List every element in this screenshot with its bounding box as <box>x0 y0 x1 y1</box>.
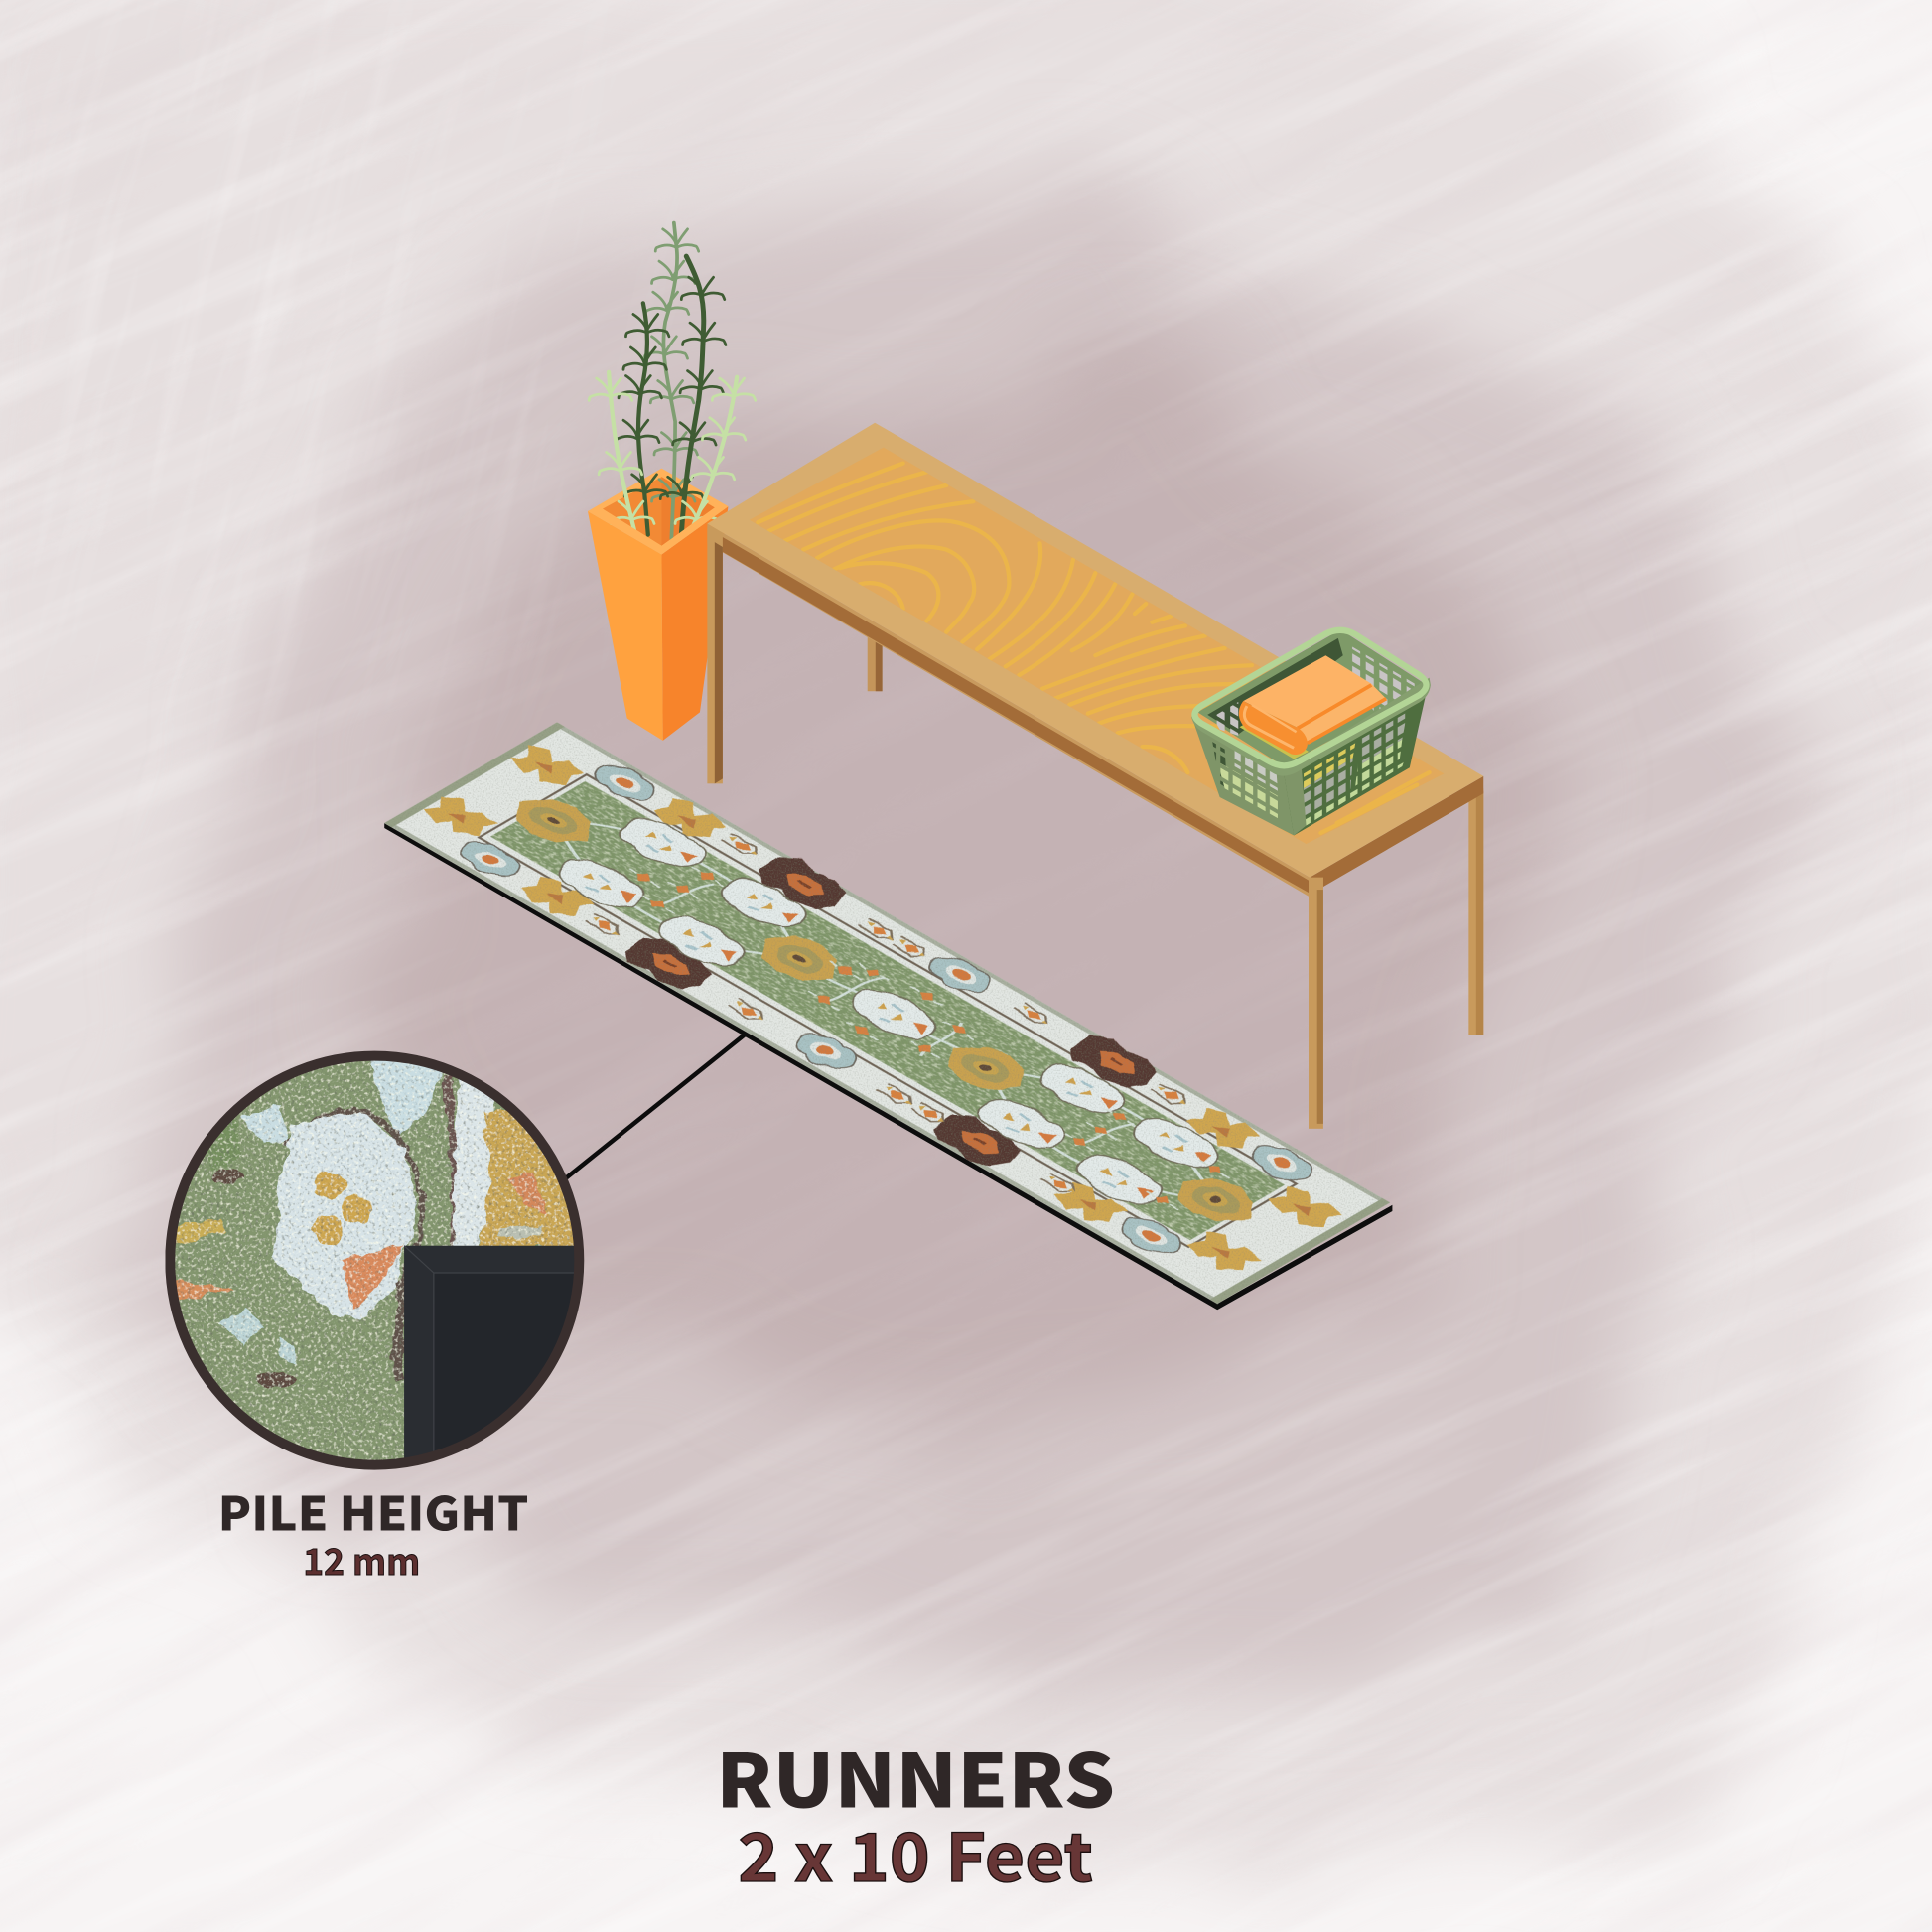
motif groups <box>415 742 1346 1277</box>
rug body <box>384 722 1390 1304</box>
runner rug <box>384 722 1392 1310</box>
gold medallions <box>497 788 1273 1233</box>
label: pile height: PILE HEIGHT <box>218 1475 528 1544</box>
basket back walls <box>1197 629 1427 766</box>
basket right face <box>1284 690 1427 835</box>
fabric backing <box>404 1246 589 1482</box>
pot front rim <box>588 506 728 554</box>
brown border motifs <box>614 851 1171 1173</box>
label: pile height <box>218 1475 528 1586</box>
gold border motifs <box>415 742 1346 1277</box>
basket with towels <box>1191 629 1431 835</box>
table front leg <box>1309 878 1323 1129</box>
blue border motifs <box>450 759 1322 1260</box>
lens pile texture <box>160 1047 592 1482</box>
title: runners size: RUNNERS <box>716 1724 1115 1830</box>
basket rim <box>1191 630 1431 776</box>
basket left face <box>1192 720 1294 835</box>
plant stems <box>589 223 756 538</box>
table <box>707 423 1483 1129</box>
label: pile height: 12 mm <box>303 1534 420 1586</box>
lens ring <box>170 1056 579 1465</box>
title: runners size <box>716 1724 1115 1901</box>
table back leg <box>868 628 883 691</box>
pot <box>588 469 728 741</box>
title: runners size: 2 x 10 Feet <box>738 1805 1093 1901</box>
table left leg <box>707 527 723 783</box>
white field motifs <box>546 811 1231 1211</box>
detail lens: pile close-up and backing <box>160 1047 592 1482</box>
table right leg <box>1468 788 1483 1035</box>
connector line from rug to detail lens <box>563 1035 745 1180</box>
small border and field flowers <box>584 833 1236 1212</box>
table top surface <box>707 423 1483 878</box>
table underside and aprons <box>707 523 1483 897</box>
folded towels <box>1239 655 1386 759</box>
rug thickness <box>384 823 1392 1310</box>
wood grain panel <box>750 448 1445 844</box>
plant pot with rosemary <box>588 223 756 741</box>
